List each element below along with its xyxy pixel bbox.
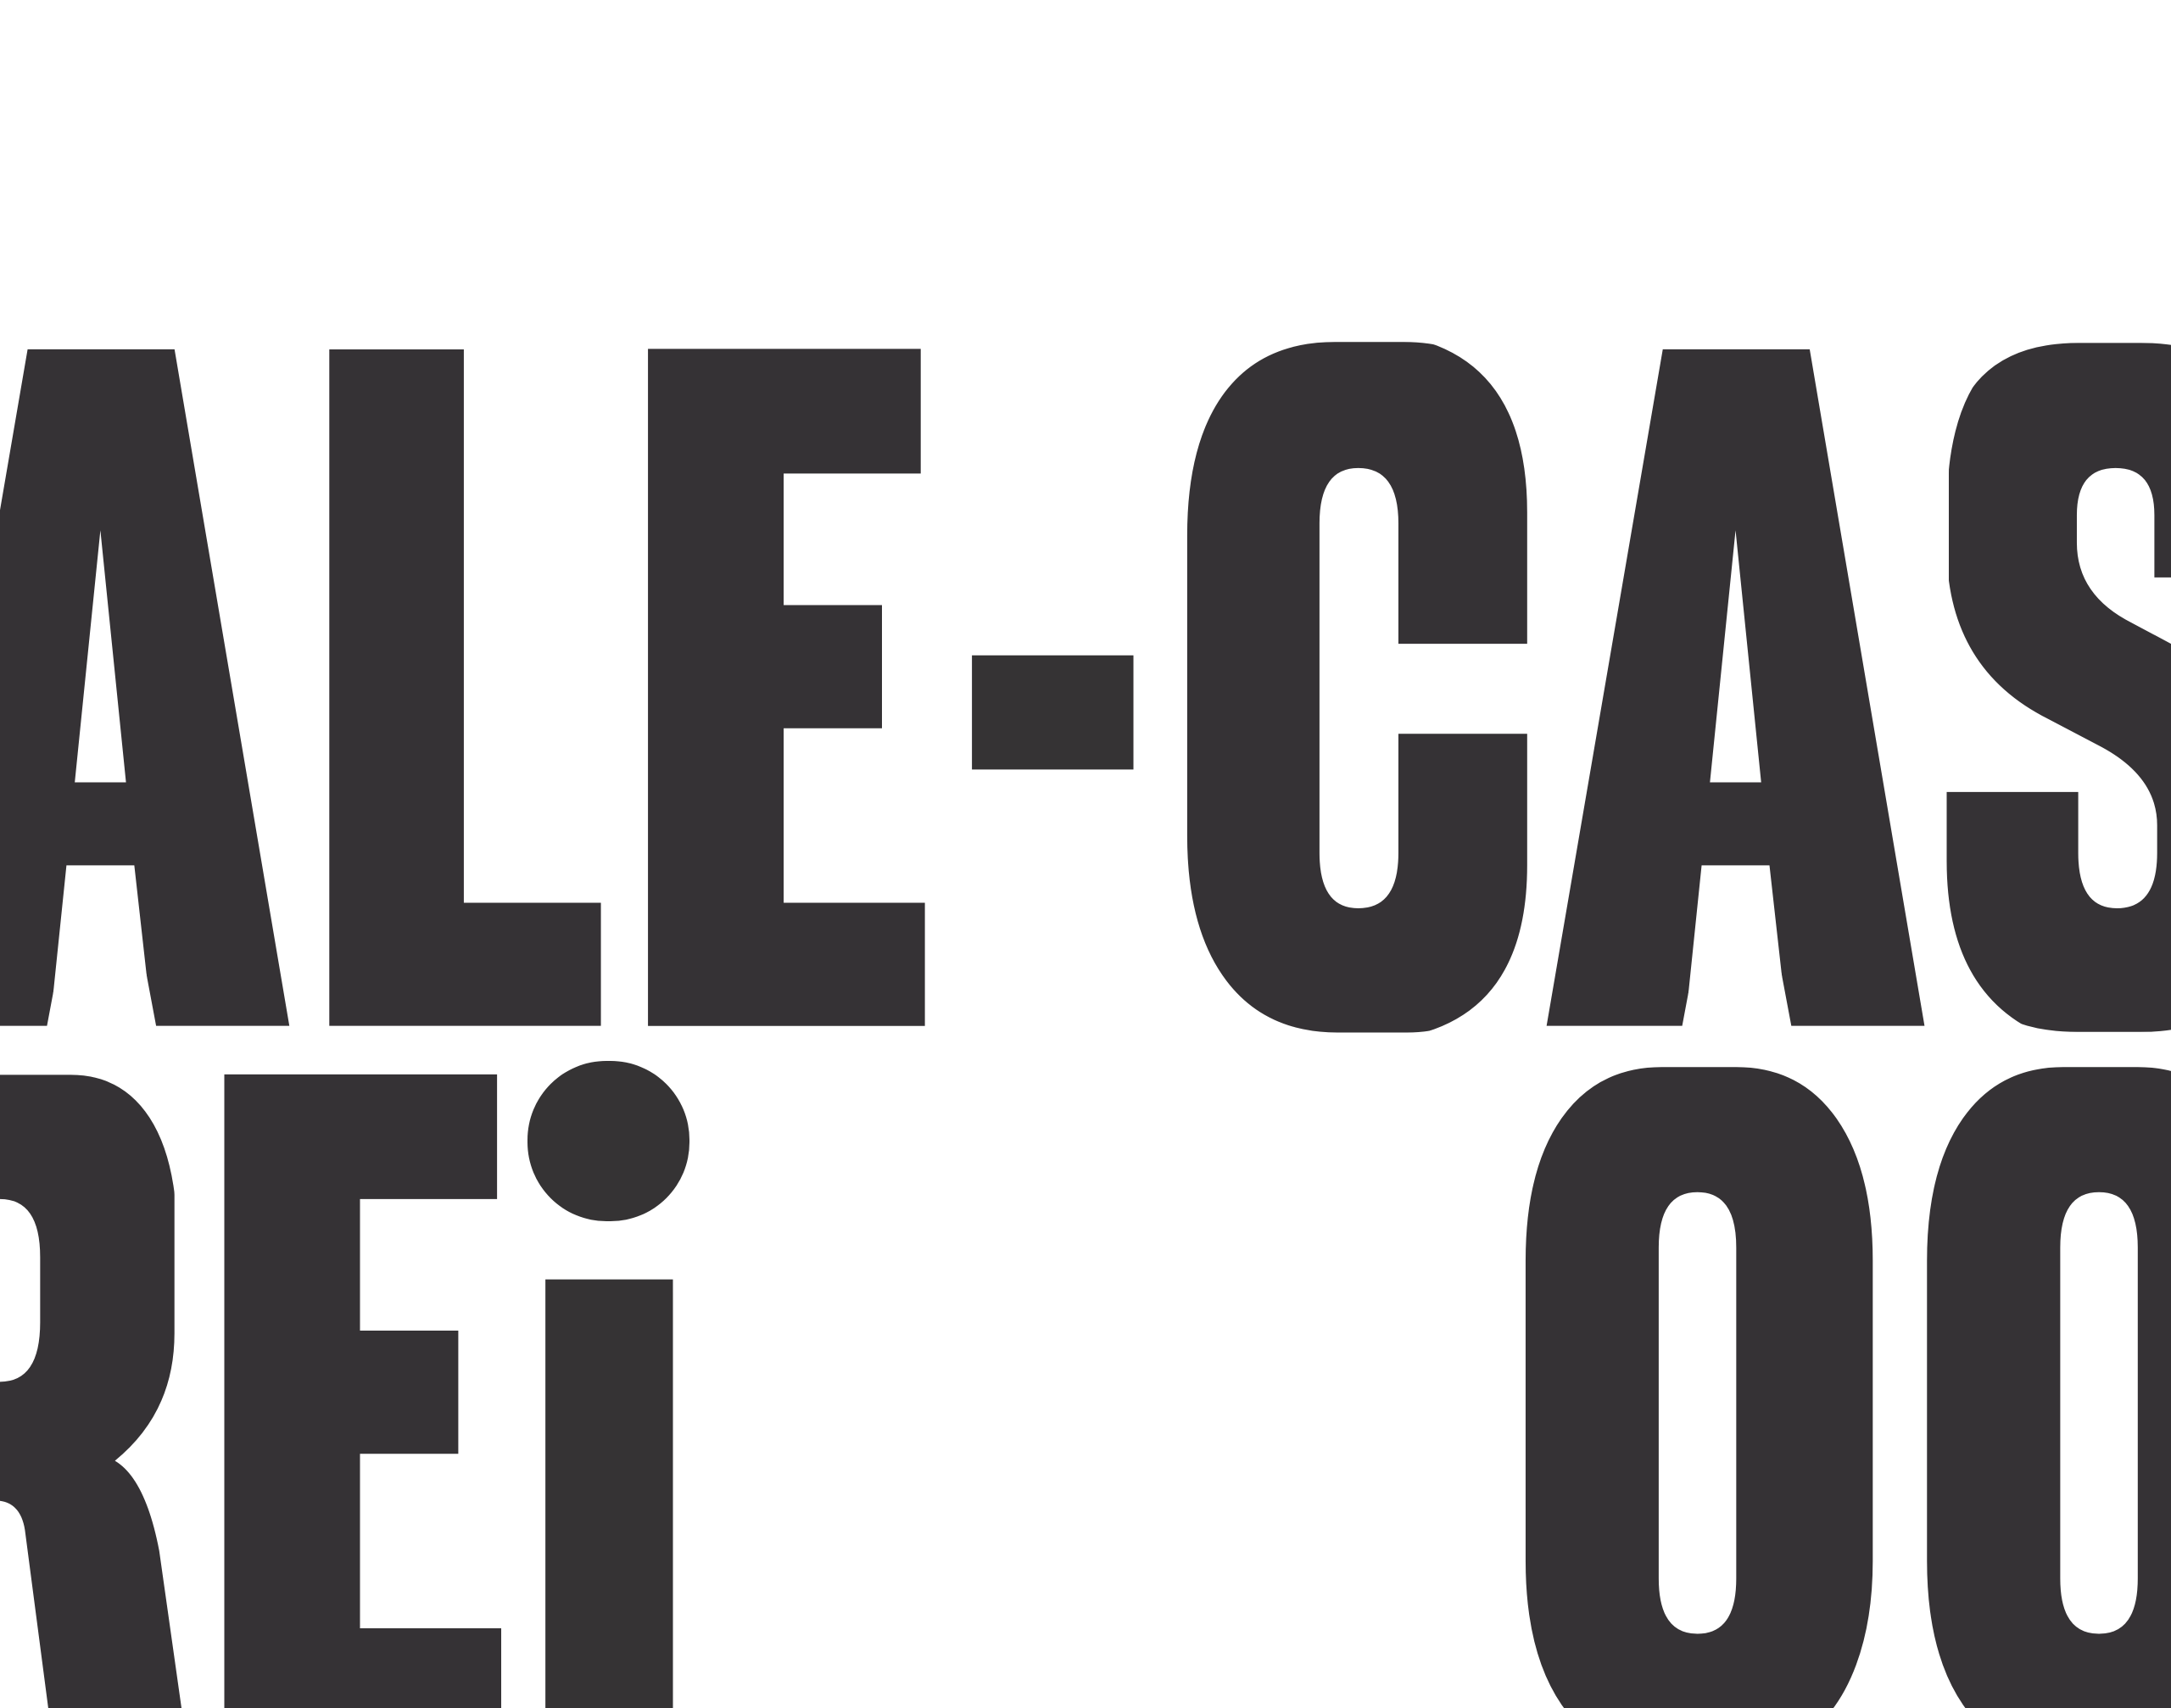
typographic poster xyxy=(0,342,2171,1708)
letter O: O xyxy=(1547,1102,1852,1708)
letter E: E xyxy=(667,181,901,1192)
letter C: C xyxy=(1204,378,1516,994)
letter A: A xyxy=(1564,191,1910,1180)
heading line one: ALE-CAS xyxy=(0,342,2171,1033)
heading line two: REi OO xyxy=(0,907,2171,1708)
letter L: L xyxy=(346,173,573,1200)
hyphen: - xyxy=(947,94,1159,1164)
